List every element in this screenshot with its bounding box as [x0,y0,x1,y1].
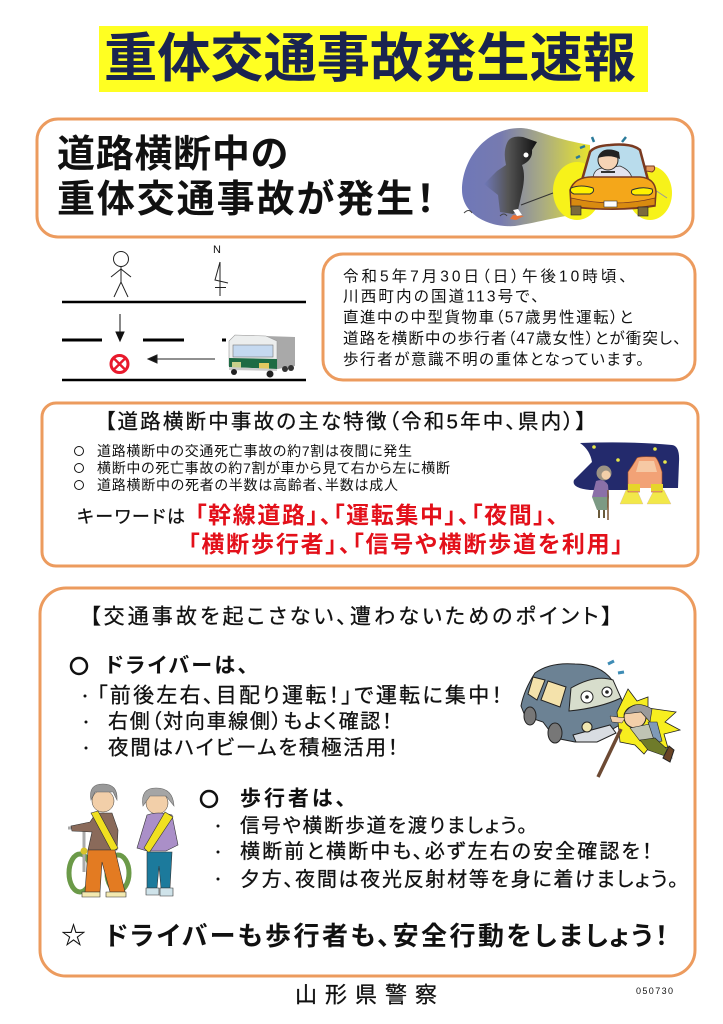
panel: characteristics [42,403,698,566]
driver section: 「前後左右、目配り運転！」で運転に集中！ [97,684,502,708]
characteristics list: 道路横断中の交通死亡事故の約7割は夜間に発生 [97,443,412,459]
road diagram [62,244,306,380]
characteristics list: 横断中の死亡事故の約7割が車から見て右から左に横断 [97,460,450,476]
panel: accident description: 直進中の中型貨物車（57歳男性運転）と [343,308,633,326]
arrow: pedestrian direction [116,314,124,341]
driver section: 夜間はハイビームを積極活用！ [108,736,398,760]
closing message: ☆ [61,922,86,950]
driver section: 右側（対向車線側）もよく確認！ [108,710,392,733]
pedestrian section [201,788,678,891]
prevention heading: 【交通事故を起こさない、遭わないためのポイント】 [90,606,612,628]
keywords in red: 「幹線道路」、「運転集中」、「夜間」、 [195,502,558,528]
characteristics list: 道路横断中の死者の半数は高齢者、半数は成人 [97,477,398,493]
icon: collision mark [111,356,128,372]
icon: truck [229,335,295,378]
icon: car hitting elderly man [521,661,680,777]
closing message: ドライバーも歩行者も、安全行動をしましょう！ [105,921,668,951]
icon: north symbol: N [213,244,221,256]
arrow: truck direction [148,355,215,363]
driver section: ドライバーは、 [105,654,248,678]
icon: north symbol [213,244,228,296]
headline text [57,134,435,221]
icon: elderly pedestrians with reflective sashes [68,784,178,897]
pedestrian section: 歩行者は、 [240,788,346,810]
panel: accident description: 川西町内の国道113号で、 [343,288,539,306]
headline text: 道路横断中の [57,134,288,176]
icon: pedestrian [111,252,131,297]
panel: accident description: 道路を横断中の歩行者（47歳女性）とが衝突し、 [343,330,681,348]
pedestrian section: 信号や横断歩道を渡りましょう。 [240,815,527,837]
pedestrian section: 夕方、夜間は夜光反射材等を身に着けましょう。 [240,868,678,891]
panel: prevention points [40,588,695,976]
headline text: 重体交通事故が発生！ [57,179,435,221]
pedestrian section: 横断前と横断中も、必ず左右の安全確認を！ [240,840,652,863]
panel: accident description: 歩行者が意識不明の重体となっています。 [343,350,644,368]
panel: accident headline [37,119,693,237]
keywords in red [188,502,623,557]
panel: accident description: 令和5年7月30日（日）午後10時頃、 [343,268,627,286]
title: 重体交通事故発生速報 [104,30,636,88]
characteristics heading: 【道路横断中事故の主な特徴（令和5年中、県内）】 [105,410,586,434]
footer: issuer: 山形県警察 [295,982,437,1008]
icon: elderly pedestrian at night [574,442,679,520]
keyword label: キーワードは [77,507,185,527]
characteristics list [74,443,450,493]
panel: accident description [323,254,695,380]
icon: driver and pedestrian at night [462,128,672,226]
keywords in red: 「横断歩行者」、「信号や横断歩道を利用」 [188,531,623,557]
footer: document code: 050730 [636,986,673,996]
driver section [71,654,502,760]
